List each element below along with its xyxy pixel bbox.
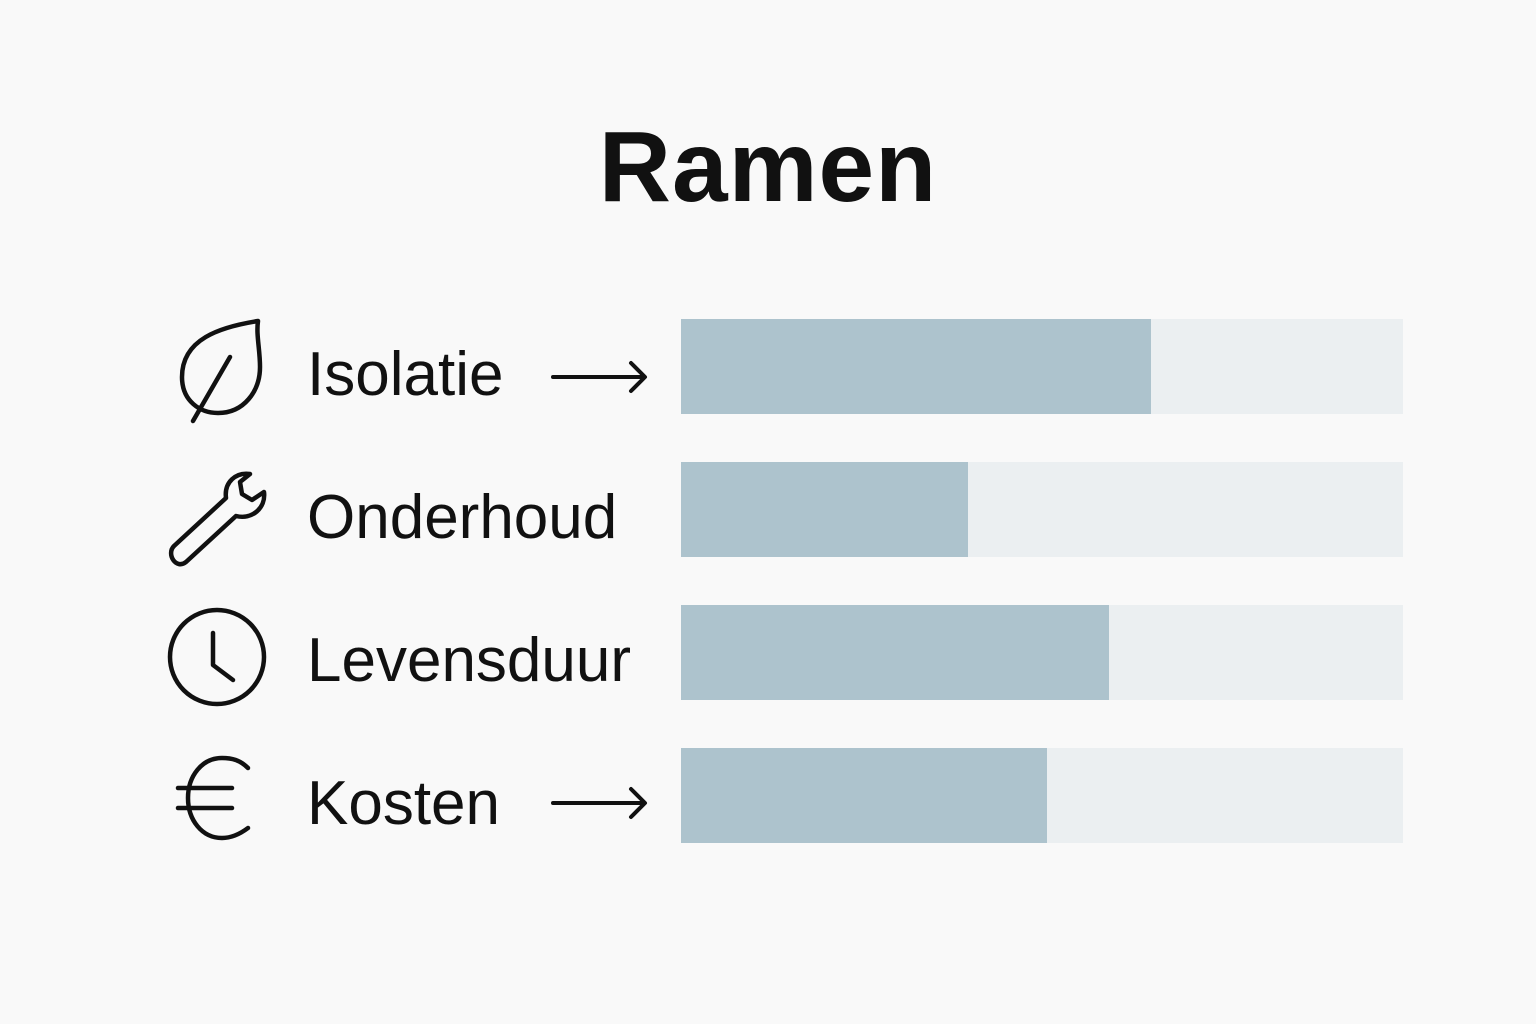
bar <box>681 319 1403 414</box>
label: Isolatie <box>307 340 503 409</box>
title: Ramen <box>599 111 937 223</box>
arrow <box>551 360 648 394</box>
label: Onderhoud <box>307 483 617 552</box>
label: Levensduur <box>307 626 631 695</box>
bar <box>681 748 1403 843</box>
label: Kosten <box>307 769 500 838</box>
icon: clock <box>168 608 266 706</box>
icon: leaf <box>180 318 262 424</box>
bar <box>681 605 1403 700</box>
row: Levensduur <box>168 605 1403 706</box>
icon: wrench <box>168 472 266 566</box>
arrow <box>551 786 648 820</box>
bar <box>681 462 1403 557</box>
row: Kosten <box>176 748 1403 843</box>
row: Isolatie <box>180 318 1403 424</box>
icon: euro <box>176 756 250 840</box>
row: Onderhoud <box>168 462 1403 566</box>
